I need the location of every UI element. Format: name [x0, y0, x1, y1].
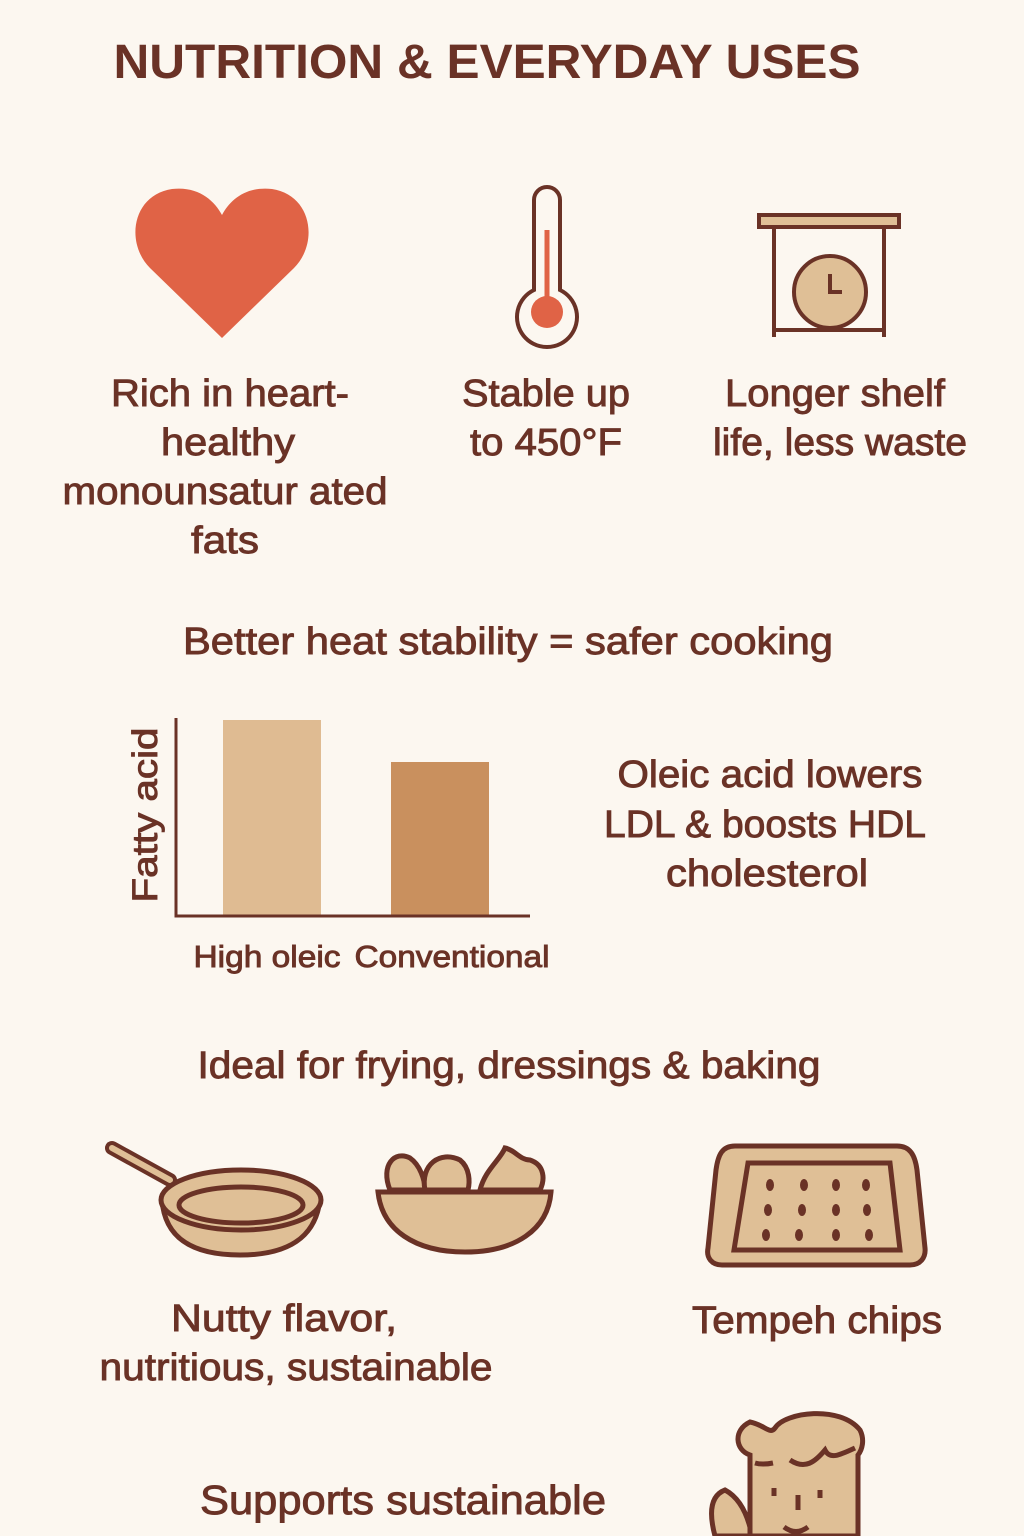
- text: shelf life: life, less waste: [713, 422, 967, 464]
- heading: supports sustainable: Supports sustainable: [200, 1477, 606, 1523]
- icon: frying pan: [112, 1148, 321, 1255]
- bar chart: Fatty acid: [126, 728, 165, 902]
- icon: salad bowl: [378, 1148, 551, 1252]
- text: nutty flavor: [100, 1298, 492, 1389]
- heading: ideal uses: Ideal for frying, dressings & baking: [198, 1045, 820, 1087]
- text: nutty flavor: Nutty flavor,: [171, 1298, 397, 1340]
- text: nutty flavor: nutritious, sustainable: [100, 1347, 492, 1389]
- text: heart-healthy fats: fats: [191, 520, 259, 562]
- text: oleic acid: LDL & boosts HDL: [604, 804, 926, 846]
- text: stable up to 450F: Stable up: [462, 373, 630, 415]
- text: heart-healthy fats: healthy: [161, 422, 295, 464]
- text: shelf life: [713, 373, 967, 464]
- bar chart: [126, 718, 550, 974]
- icon: character: [712, 1414, 863, 1536]
- bar chart: High oleic: [194, 939, 340, 974]
- text: tempeh chips: Tempeh chips: [692, 1300, 942, 1342]
- bar chart: Conventional: [354, 939, 550, 974]
- heading: heat stability: Better heat stability = safer cooking: [183, 621, 833, 663]
- text: heart-healthy fats: Rich in heart-: [111, 373, 349, 415]
- text: heart-healthy fats: [62, 373, 388, 562]
- text: shelf life: Longer shelf: [725, 373, 945, 415]
- text: oleic acid: cholesterol: [666, 853, 868, 895]
- text: heart-healthy fats: monounsatur ated: [62, 471, 388, 513]
- icon: thermometer: [517, 187, 577, 347]
- icon: shelf with clock: [759, 215, 899, 337]
- icon: tempeh tray: [708, 1146, 925, 1265]
- icon: heart: [135, 189, 309, 338]
- text: stable up to 450F: [462, 373, 630, 464]
- title: NUTRITION & EVERYDAY USES: [114, 36, 860, 89]
- text: oleic acid: [604, 754, 926, 895]
- text: stable up to 450F: to 450°F: [470, 422, 622, 464]
- text: oleic acid: Oleic acid lowers: [618, 754, 922, 796]
